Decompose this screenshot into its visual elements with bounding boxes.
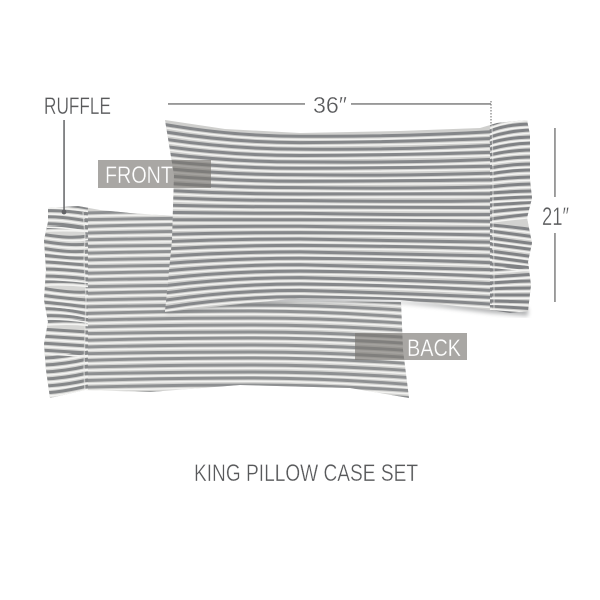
dimension: height 21 inches: 21″ [542,203,569,231]
label: back: BACK [407,335,461,362]
pillow shadow [165,296,528,316]
pillow: front [160,115,537,318]
back ruffle [44,206,88,398]
front ruffle [490,120,532,313]
label: back [355,333,467,362]
label: ruffle: RUFFLE [44,93,111,120]
ruffle leader line [62,120,66,214]
caption: KING PILLOW CASE SET [194,460,418,487]
label: front [98,160,211,189]
dimension: width 36 inches: 36″ [313,92,347,118]
label: front: FRONT [105,162,173,189]
pillow: back [40,200,415,403]
